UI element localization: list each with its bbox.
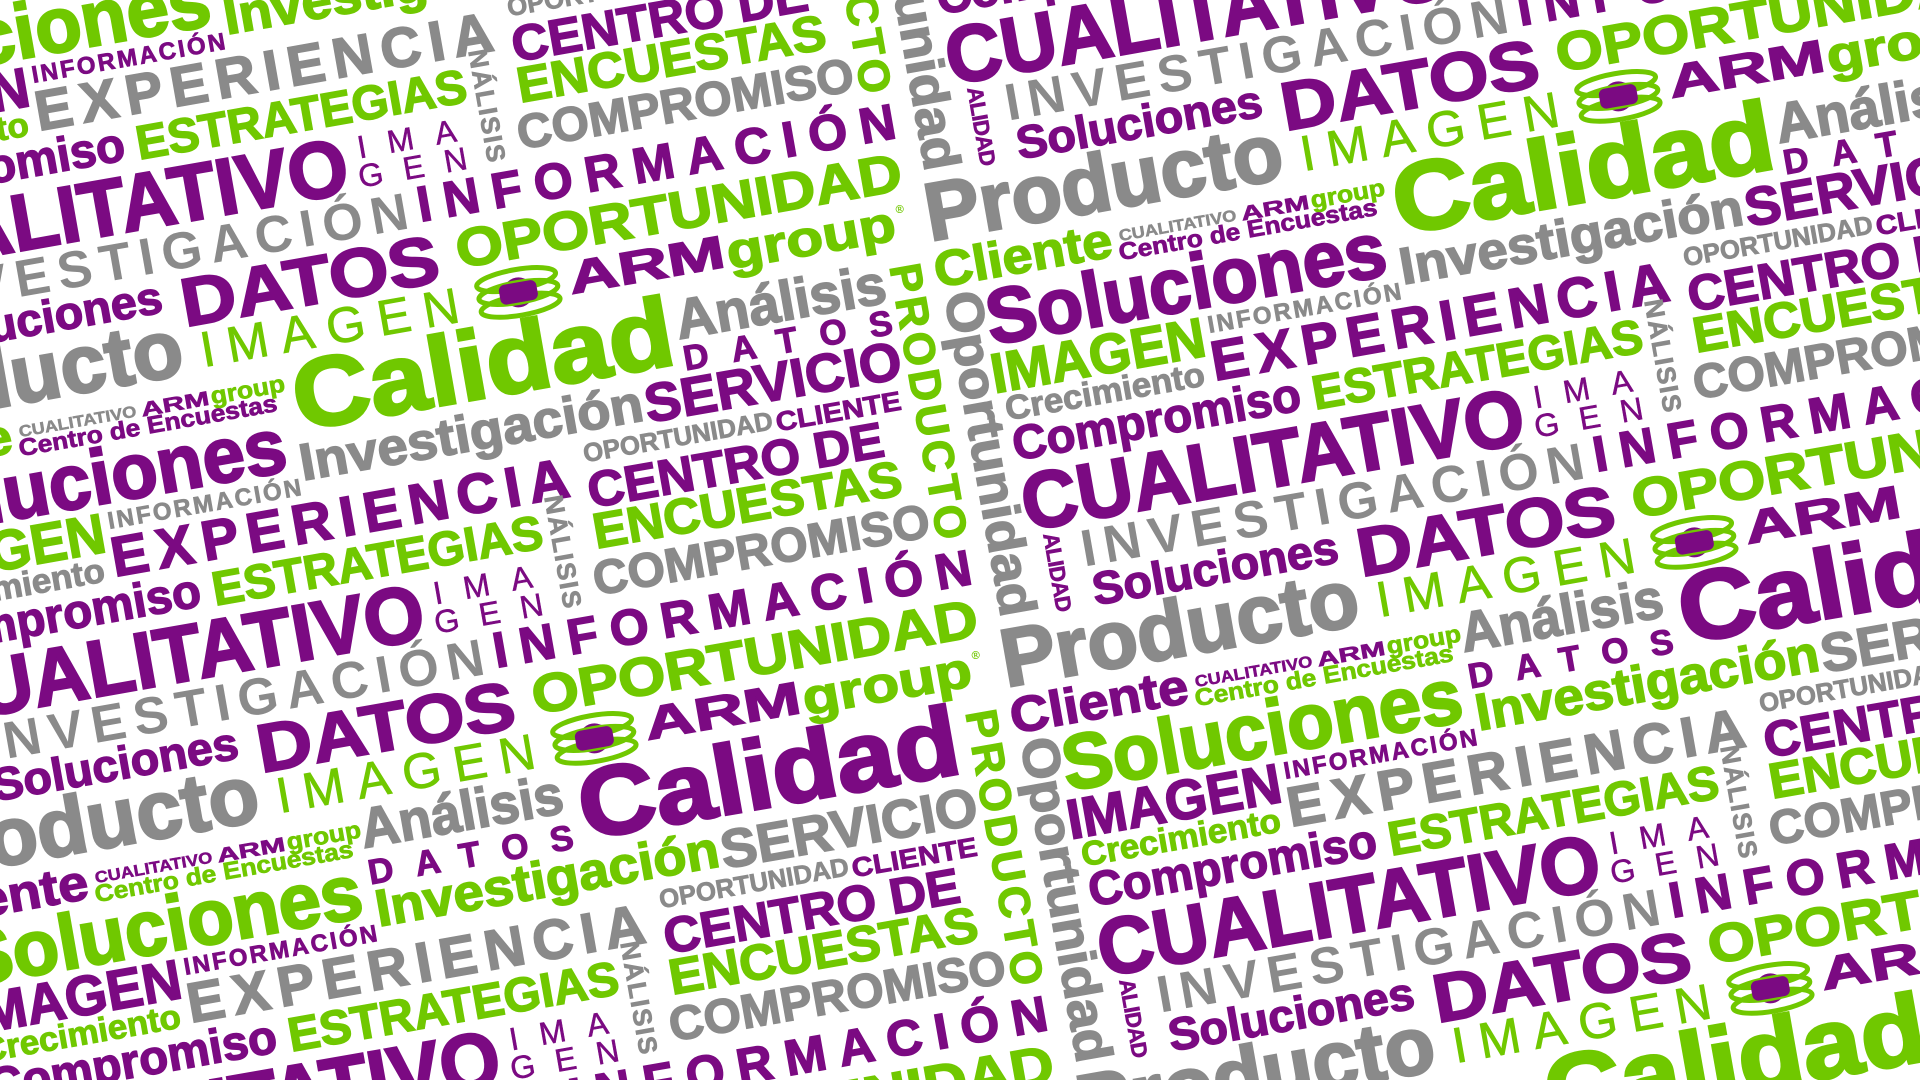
word: Calidad: Calidad — [1384, 80, 1782, 255]
word: OPORTUNIDAD: OPORTUNIDAD — [527, 589, 983, 726]
word cluster: right upper with green Calidad: Compromiso — [1008, 369, 1305, 471]
word cluster: upper left, partial: INFORMACIÓN — [412, 93, 900, 233]
word: Producto: Producto — [917, 106, 1290, 259]
word cluster: right upper with green Calidad: ARM — [1239, 192, 1311, 226]
word cluster: left centre with green Calidad: COMPROMISO — [589, 495, 934, 606]
word cluster: right upper with green Calidad: GEN — [1531, 390, 1646, 445]
word cluster: right centre with purple Calidad: IMAGEN — [1062, 751, 1286, 851]
word cluster: lower centre with purple Calidad: Oportunidad — [1008, 732, 1123, 1067]
logo wordmark: ARM group — [564, 193, 911, 308]
word cluster: lower centre with purple Calidad: CENTRO DE — [659, 858, 964, 965]
word cluster: upper left, partial: EXPERIENCIA — [30, 0, 498, 143]
word cluster: left centre with green Calidad: ARM — [139, 388, 211, 422]
word cluster: lower centre with purple Calidad: PRODUCTO — [956, 706, 1052, 989]
word cluster: upper left, partial: ESTRATEGIAS — [132, 60, 471, 171]
logo wordmark: ARM group: ® — [895, 203, 905, 216]
word cluster: right upper with green Calidad: IMAGEN — [1296, 81, 1564, 182]
word cluster: left centre with green Calidad: Centro de Encuestas — [17, 390, 279, 462]
word cluster: right centre with purple Calidad: DATOS — [1351, 471, 1621, 592]
word cluster: right centre with purple Calidad: ESTRATEGIAS — [1384, 756, 1723, 867]
word cluster: right upper with green Calidad: DATOS — [1275, 25, 1545, 146]
word cluster: lower centre with purple Calidad: ESTRATEGIAS — [284, 952, 623, 1063]
word cluster: left centre with green Calidad: IMAGEN — [196, 277, 464, 378]
word cluster: right upper with green Calidad: ALIDAD — [962, 85, 1001, 168]
word cluster: right centre with purple Calidad: Soluciones — [1088, 521, 1342, 615]
word cluster: right centre with purple Calidad: ALIDAD — [1038, 531, 1077, 614]
word cluster: lower centre with purple Calidad: IMA — [506, 1005, 612, 1057]
logo wordmark: ARM group: ARM — [640, 671, 805, 750]
word: Producto: Producto — [993, 552, 1366, 705]
word cluster: right centre with purple Calidad — [979, 347, 1920, 1036]
word cluster: right upper with green Calidad: Centro de Encuestas — [1117, 194, 1379, 266]
word cluster: right upper with green Calidad: ESTRATEGIAS — [1308, 310, 1647, 421]
word cluster: upper left, partial: INFORMACIÓN — [29, 27, 227, 89]
word cluster: lower centre with purple Calidad: ENCUESTAS — [664, 896, 982, 1006]
word cluster: left centre with green Calidad: CLIENTE — [773, 386, 904, 437]
word cluster: left centre with green Calidad: EXPERIENCIA — [106, 446, 574, 589]
word cluster: right centre with purple Calidad: INFORMACIÓN — [1281, 723, 1479, 785]
word cluster: upper left, partial: ENCUESTAS — [512, 4, 830, 114]
word: Calidad: Calidad — [569, 685, 968, 860]
word cluster: right centre with purple Calidad: NÁLISIS — [1714, 743, 1764, 860]
word cluster: lower centre with purple Calidad: IMAGEN — [272, 723, 540, 824]
word cluster: lower centre with purple Calidad: Análisis — [355, 762, 568, 860]
logo wordmark: ARM group: group — [722, 195, 900, 280]
word cluster: lower centre with purple Calidad: Investigación — [371, 821, 724, 938]
word cluster: left centre with green Calidad: CENTRO DE — [583, 412, 888, 519]
word cluster: right centre with purple Calidad: Compromiso — [1084, 815, 1381, 917]
word cluster: lower centre with purple Calidad: DATOS — [251, 667, 521, 788]
word cluster: right centre with purple Calidad: Centro de Encuestas — [1193, 640, 1455, 712]
word cluster: bottom right, partial — [1056, 793, 1920, 1080]
word cluster: upper left, partial: NÁLISIS — [462, 47, 512, 164]
word cluster: right centre with purple Calidad: IMA — [1606, 809, 1712, 861]
word cluster: right upper with green Calidad: group — [1308, 175, 1387, 214]
word cluster: left centre with green Calidad: INFORMACIÓN — [105, 473, 303, 535]
icon: ARM group logo rings — [1651, 513, 1738, 572]
word cluster: right centre with purple Calidad: Investigación — [1471, 625, 1824, 742]
word cluster: lower centre with purple Calidad: group — [284, 817, 363, 856]
word cluster: right centre with purple Calidad: CUALITATIVO — [1090, 817, 1607, 993]
word cluster: bottom right, partial: IMAGEN — [1448, 973, 1716, 1074]
word cluster: bottom right, partial: DATOS — [1427, 917, 1697, 1038]
logo wordmark: ARM group: group — [798, 641, 976, 726]
word cluster: left centre with green Calidad: group — [208, 371, 287, 410]
word cluster: right centre with purple Calidad: Análisis — [1455, 566, 1668, 664]
word cluster: right upper with green Calidad: Soluciones — [1012, 75, 1266, 169]
word cluster: right centre with purple Calidad: ARM — [1315, 638, 1387, 672]
word cluster: upper left, partial: GEN — [355, 140, 470, 195]
word cluster: left centre with green Calidad: OPORTUNIDAD — [581, 405, 775, 468]
word cluster: right upper with green Calidad: CUALITATIVO — [1118, 208, 1238, 245]
logo wordmark: ARM group: ® — [971, 649, 981, 662]
word cluster: left centre with green Calidad — [0, 86, 1047, 813]
word cluster: bottom right, partial: ALIDAD — [1114, 977, 1153, 1060]
word cluster: lower centre with purple Calidad: SERVICIO — [716, 776, 982, 881]
word cluster: lower centre with purple Calidad: NÁLISIS — [614, 939, 664, 1056]
word cluster: lower centre with purple Calidad: CLIENTE — [849, 832, 980, 883]
word cluster: left centre with green Calidad: Investigación — [295, 375, 648, 492]
word cluster: right centre with purple Calidad: IMAGEN — [1372, 527, 1640, 628]
word cluster: right centre with purple Calidad: group — [1384, 621, 1463, 660]
word cluster: right upper with green Calidad: INFORMACIÓN — [1205, 277, 1403, 339]
word cluster: upper left, partial: IMA — [354, 113, 460, 165]
icon: ARM group logo rings — [551, 709, 638, 768]
word cluster: right upper with green Calidad — [903, 0, 1920, 590]
logo wordmark: ARM group — [1664, 0, 1920, 112]
word cluster: left centre with green Calidad: NÁLISIS — [538, 493, 588, 610]
logo wordmark: ARM group — [640, 639, 987, 754]
word cluster: left centre with green Calidad: INFORMACIÓN — [488, 539, 976, 679]
word: Calidad: Calidad — [284, 276, 682, 451]
word cluster: lower centre with purple Calidad: COMPROMISO — [665, 941, 1010, 1052]
word cluster: lower centre with purple Calidad: INFORMACIÓN — [181, 919, 379, 981]
word cluster: left centre with green Calidad: ENCUESTAS — [588, 450, 906, 560]
word cluster: bottom right, partial: INVESTIGACIÓN — [1152, 879, 1665, 1025]
logo wordmark: ARM group: ARM — [564, 225, 729, 304]
word cluster: right centre with purple Calidad: Cliente — [1005, 658, 1192, 744]
word cluster: right centre with purple Calidad: Soluciones — [1055, 651, 1469, 808]
word cluster: right centre with purple Calidad: EXPERIENCIA — [1282, 696, 1750, 839]
word cluster: lower centre with purple Calidad: CUALITATIVO — [94, 850, 214, 887]
word cluster: lower centre with purple Calidad: EXPERIENCIA — [182, 892, 650, 1035]
word cluster: left centre with green Calidad: SERVICIO — [640, 330, 906, 435]
word cluster: right upper with green Calidad: IMA — [1530, 363, 1636, 415]
word cluster: right upper with green Calidad: CUALITATIVO — [1014, 371, 1531, 547]
word cluster: left centre with green Calidad: IMA — [430, 559, 536, 611]
icon: ARM group logo rings — [1575, 67, 1662, 126]
word cluster: upper left, partial — [0, 0, 971, 361]
word cluster: right centre with purple Calidad: INVESTIGACIÓN — [1076, 433, 1589, 579]
word cluster: lower centre with purple Calidad — [0, 532, 1123, 1080]
word cluster: lower centre with purple Calidad: DATOS — [365, 818, 577, 892]
word cluster: right upper with green Calidad: Cliente — [929, 212, 1116, 298]
word cluster: right upper with green Calidad: NÁLISIS — [1638, 297, 1688, 414]
word cluster: upper left, partial: COMPROMISO — [513, 49, 858, 160]
word cluster: lower centre with purple Calidad: OPORTUNIDAD — [657, 851, 851, 914]
word cluster: right centre with purple Calidad: CUALITATIVO — [1194, 654, 1314, 691]
word cluster: right centre with purple Calidad: Crecimiento — [1078, 802, 1284, 874]
icon: ARM group logo rings — [1727, 959, 1814, 1018]
word cluster: right centre with purple Calidad: DATOS — [1465, 622, 1677, 696]
word cluster: left centre with green Calidad: Oportunidad — [932, 286, 1047, 621]
word cluster: right upper with green Calidad: OPORTUNIDAD — [1681, 209, 1875, 272]
word cluster: left centre with green Calidad: DATOS — [680, 303, 896, 378]
word cluster: left centre with green Calidad: DATOS — [175, 221, 445, 342]
word cluster: top right, partial — [931, 0, 1920, 136]
word cluster: left centre with green Calidad: GEN — [431, 586, 546, 641]
word: OPORTUNIDAD: OPORTUNIDAD — [451, 143, 907, 280]
word cluster: left centre with green Calidad: Análisis — [670, 252, 891, 351]
word cluster: lower centre with purple Calidad: ARM — [215, 834, 287, 868]
word cluster: right upper with green Calidad: EXPERIENCIA — [1206, 250, 1674, 393]
word cluster: left centre with green Calidad: CUALITATIVO — [18, 404, 138, 441]
word cluster: lower centre with purple Calidad: Centro de Encuestas — [93, 836, 355, 908]
word cluster: left centre with green Calidad: PRODUCTO — [880, 260, 976, 543]
word cluster: left centre with green Calidad: ESTRATEGIAS — [208, 506, 547, 617]
logo wordmark: ARM group: ARM — [1664, 29, 1829, 108]
logo wordmark: ARM group: ARM — [1740, 475, 1905, 554]
word cluster: right upper with green Calidad: Soluciones — [979, 205, 1393, 362]
word cluster: right centre with purple Calidad: GEN — [1607, 836, 1722, 891]
icon: ARM group logo rings — [475, 263, 562, 322]
word cluster: right upper with green Calidad: Investigación — [1395, 179, 1748, 296]
word cluster: bottom right, partial: Soluciones — [1164, 967, 1418, 1061]
word cluster: right upper with green Calidad: IMAGEN — [986, 305, 1210, 405]
word cluster: right upper with green Calidad: Crecimiento — [1002, 356, 1208, 428]
